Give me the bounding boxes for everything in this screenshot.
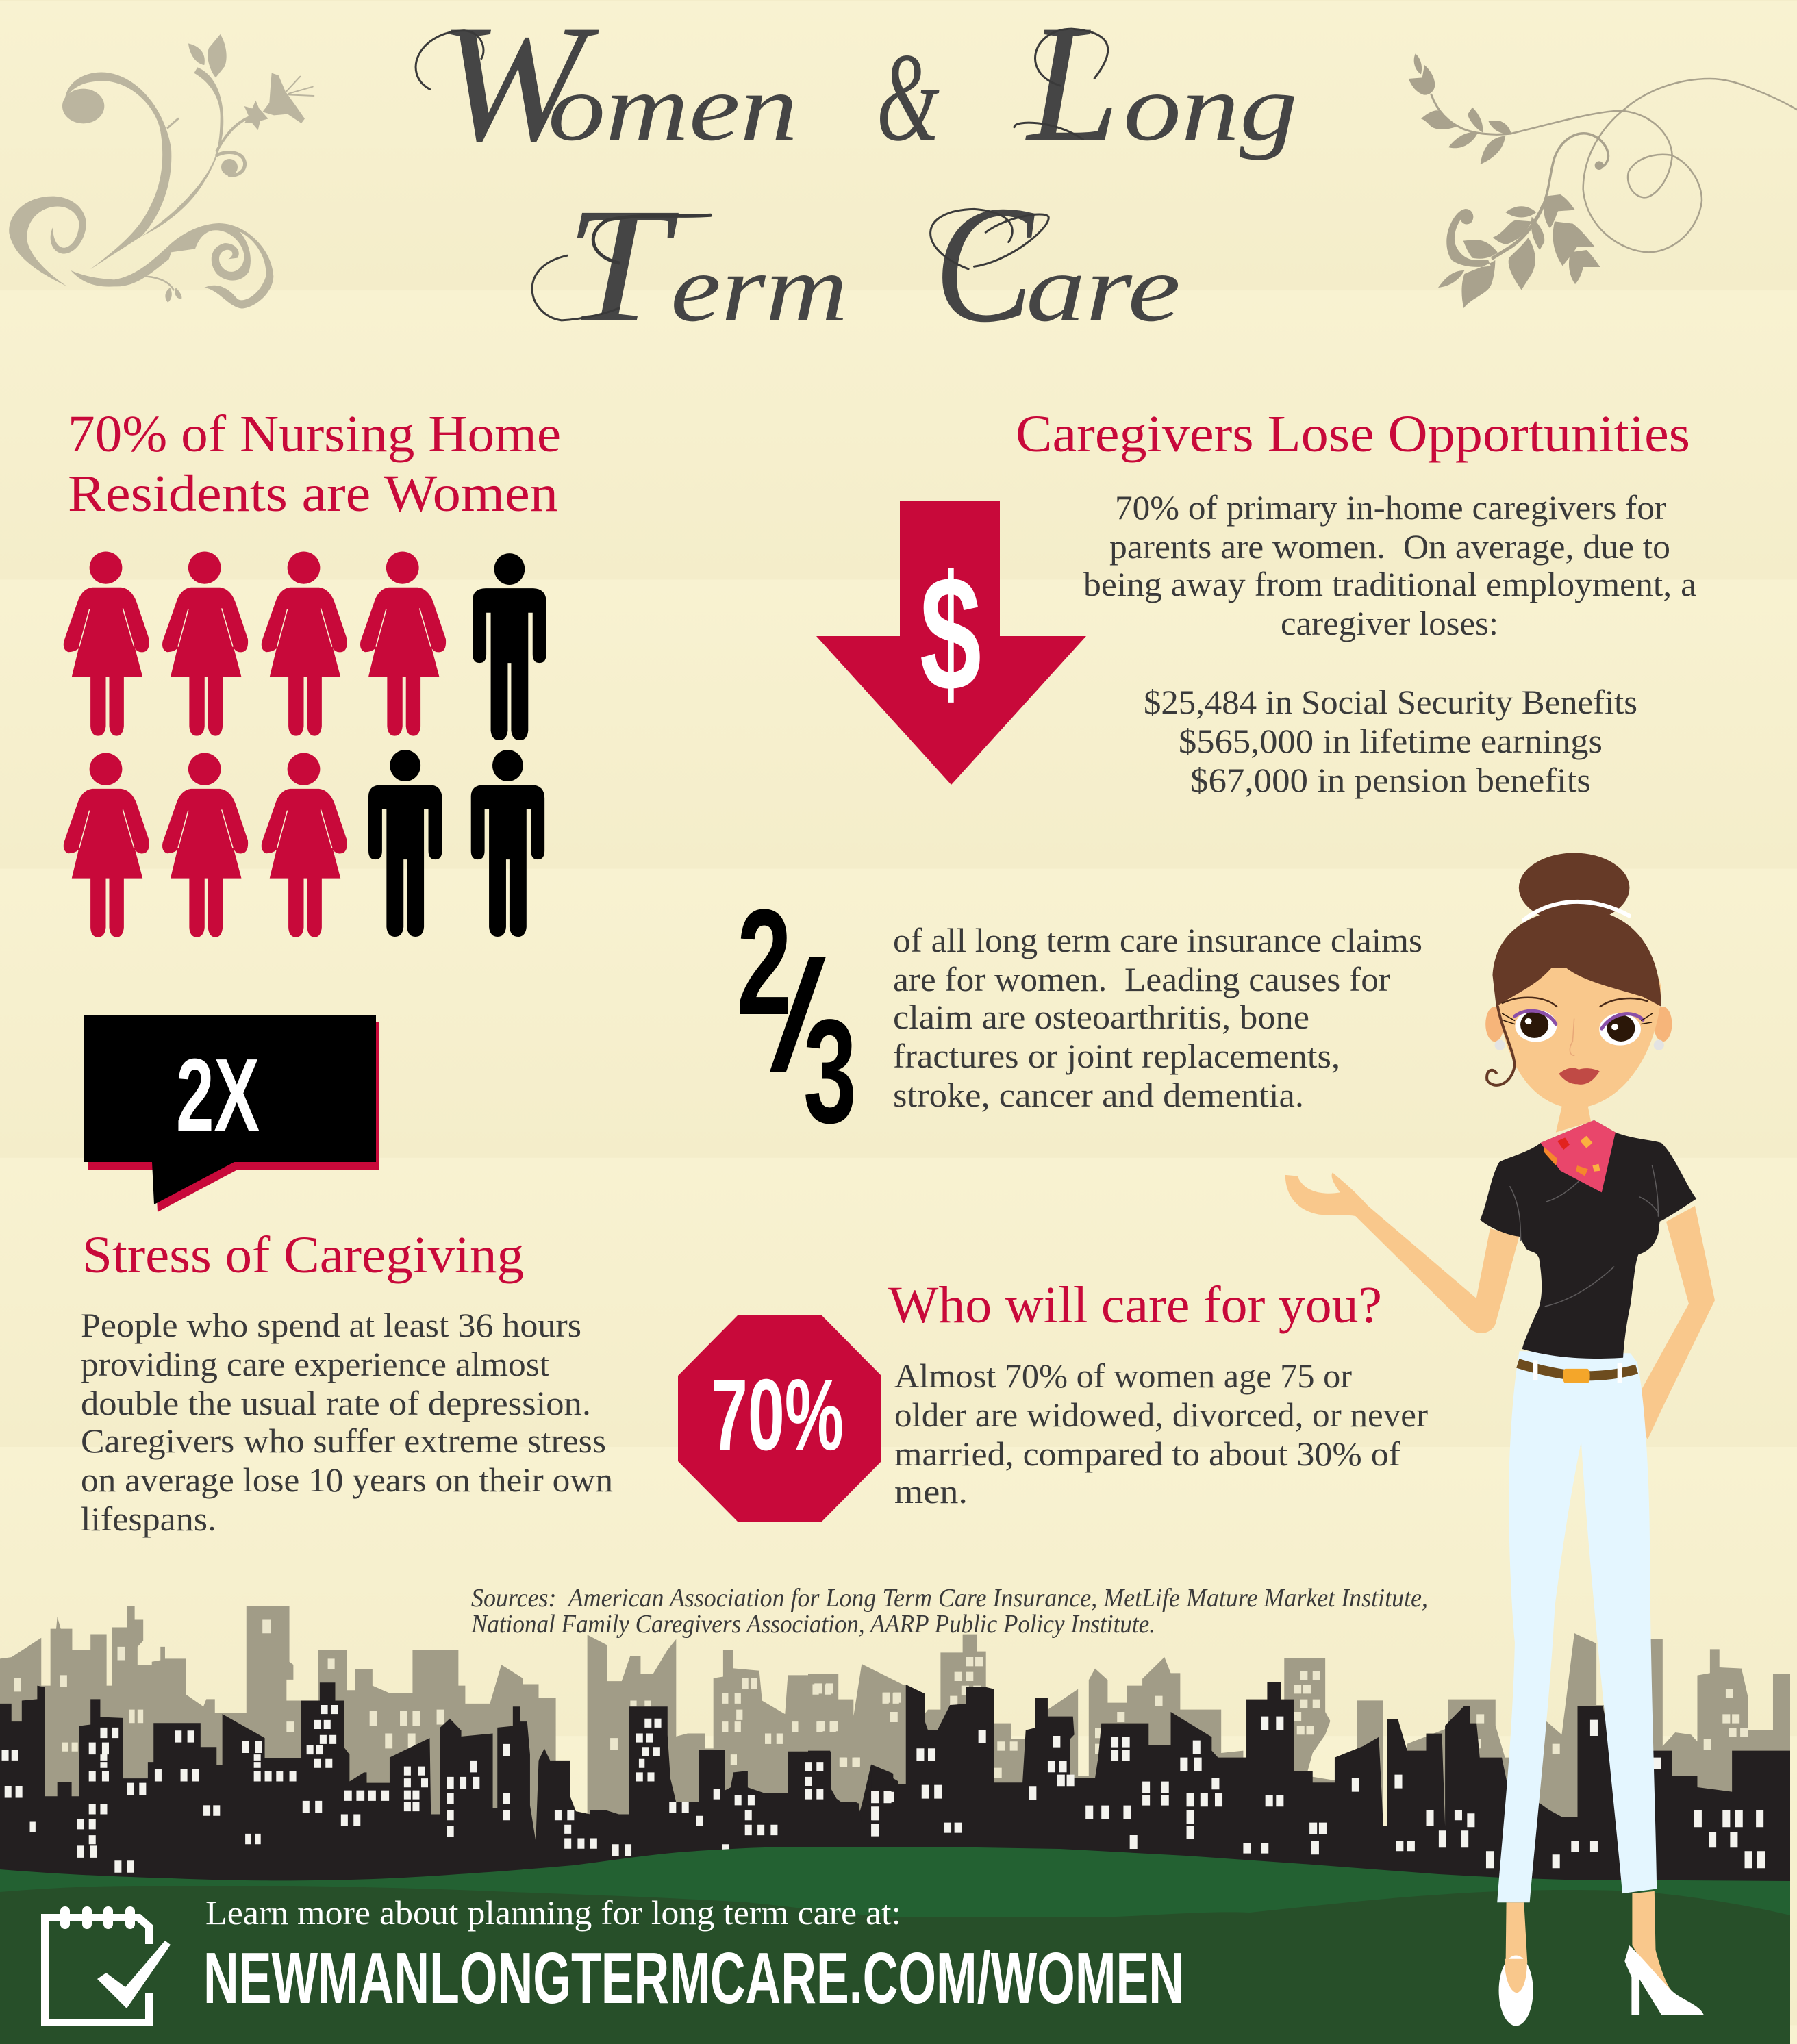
heading: caregivers lose opportunities: Caregivers Lose Opportunities: [1016, 405, 1690, 463]
title: are: [1026, 236, 1181, 342]
title: [438, 0, 1298, 357]
skyline: back buildings: [0, 1606, 1790, 1841]
text block: caregivers lose: $25,484 in Social Security Benefits: [1144, 683, 1637, 721]
text block: caregivers lose: being away from traditional employment, a: [1083, 565, 1696, 603]
icon: notepad with check mark: [41, 1906, 171, 2026]
icon: down arrow with dollar sign: [816, 501, 1086, 785]
heading: who will care for you: Who will care for you?: [888, 1276, 1382, 1334]
statistic: two thirds: [737, 878, 857, 1154]
text block: sources: [470, 1584, 1428, 1639]
title: T: [565, 174, 679, 356]
icon: 70% stop sign: [678, 1315, 881, 1522]
title decorative swashes: [416, 29, 1108, 320]
text block: insurance claims: fractures or joint replacements,: [893, 1037, 1340, 1075]
text block: who will care for you: married, compared to about 30% of: [894, 1435, 1400, 1473]
title: ong: [1123, 55, 1298, 161]
text block: caregivers lose: 70% of primary in-home caregivers for: [1115, 488, 1666, 527]
woman: legs and shoes: [1497, 1351, 1704, 2026]
statistic: two thirds: 3: [803, 988, 857, 1154]
flourish: top right ornament: [1409, 53, 1797, 308]
text block: caregivers lose: $565,000 in lifetime earnings: [1179, 722, 1603, 760]
woman: upper body and head: [1285, 853, 1696, 1359]
text block: insurance claims: claim are osteoarthritis, bone: [893, 998, 1309, 1036]
skyline: front buildings: [0, 1682, 1790, 1881]
flourish: top left ornament: [9, 34, 314, 309]
callout: 2X speech bubble: [84, 1015, 379, 1212]
heading: 70% of nursing home residents are women: [68, 405, 561, 522]
icon: 70% stop sign: 70%: [711, 1359, 844, 1472]
illustration: woman: [1285, 853, 1715, 2026]
text block: stress of caregiving: People who spend at least 36 hours: [81, 1306, 581, 1344]
text block: who will care for you: men.: [894, 1472, 968, 1511]
text block: caregivers lose: [1083, 488, 1696, 799]
text block: stress of caregiving: providing care experience almost: [81, 1345, 549, 1383]
heading: 70% of nursing home residents are women: 70% of Nursing Home: [68, 405, 561, 463]
text: learn more: Learn more about planning for long term care at:: [205, 1893, 901, 1932]
callout: 2X speech bubble: 2X: [176, 1037, 260, 1152]
text block: caregivers lose: parents are women. On average, due to: [1109, 527, 1670, 566]
title: omen: [548, 55, 798, 161]
text block: insurance claims: of all long term care insurance claims: [893, 921, 1422, 959]
ground: dark green field: [0, 1886, 1790, 2044]
text block: stress of caregiving: lifespans.: [81, 1500, 216, 1538]
text block: who will care for you: older are widowed, divorced, or never: [894, 1396, 1428, 1434]
text block: who will care for you: Almost 70% of women age 75 or: [894, 1357, 1352, 1395]
text block: who will care for you: [894, 1357, 1428, 1511]
woman: right arm: [1630, 1206, 1715, 1439]
heading: 70% of nursing home residents are women: Residents are Women: [68, 465, 558, 522]
statistic: two thirds: 2: [737, 878, 792, 1046]
text block: sources: National Family Caregivers Association, AARP Public Policy Institute.: [470, 1610, 1155, 1639]
text block: insurance claims: stroke, cancer and dementia.: [893, 1076, 1304, 1114]
text block: stress of caregiving: [81, 1306, 613, 1538]
text block: insurance claims: are for women. Leading causes for: [893, 960, 1390, 998]
text: website url: NEWMANLONGTERMCARE.COM/WOMEN: [203, 1938, 1184, 2019]
title: &: [877, 27, 940, 168]
heading: stress of caregiving: Stress of Caregiving: [82, 1226, 524, 1284]
pictogram: seven women and three men: [64, 552, 546, 937]
text block: stress of caregiving: Caregivers who suffer extreme stress: [81, 1422, 606, 1460]
ground: bright green hill: [0, 1847, 1790, 2044]
title: erm: [670, 236, 848, 342]
title: C: [934, 171, 1035, 357]
text block: caregivers lose: caregiver loses:: [1281, 604, 1498, 642]
text block: stress of caregiving: double the usual rate of depression.: [81, 1384, 591, 1422]
text block: caregivers lose: $67,000 in pension benefits: [1190, 761, 1591, 799]
text block: stress of caregiving: on average lose 10 years on their own: [81, 1461, 613, 1499]
text block: insurance claims: [893, 921, 1422, 1114]
text block: sources: Sources: American Association for Long Term Care Insurance, MetLife Mature Market Institute,: [471, 1584, 1428, 1613]
icon: down arrow with dollar sign: $: [920, 542, 981, 725]
